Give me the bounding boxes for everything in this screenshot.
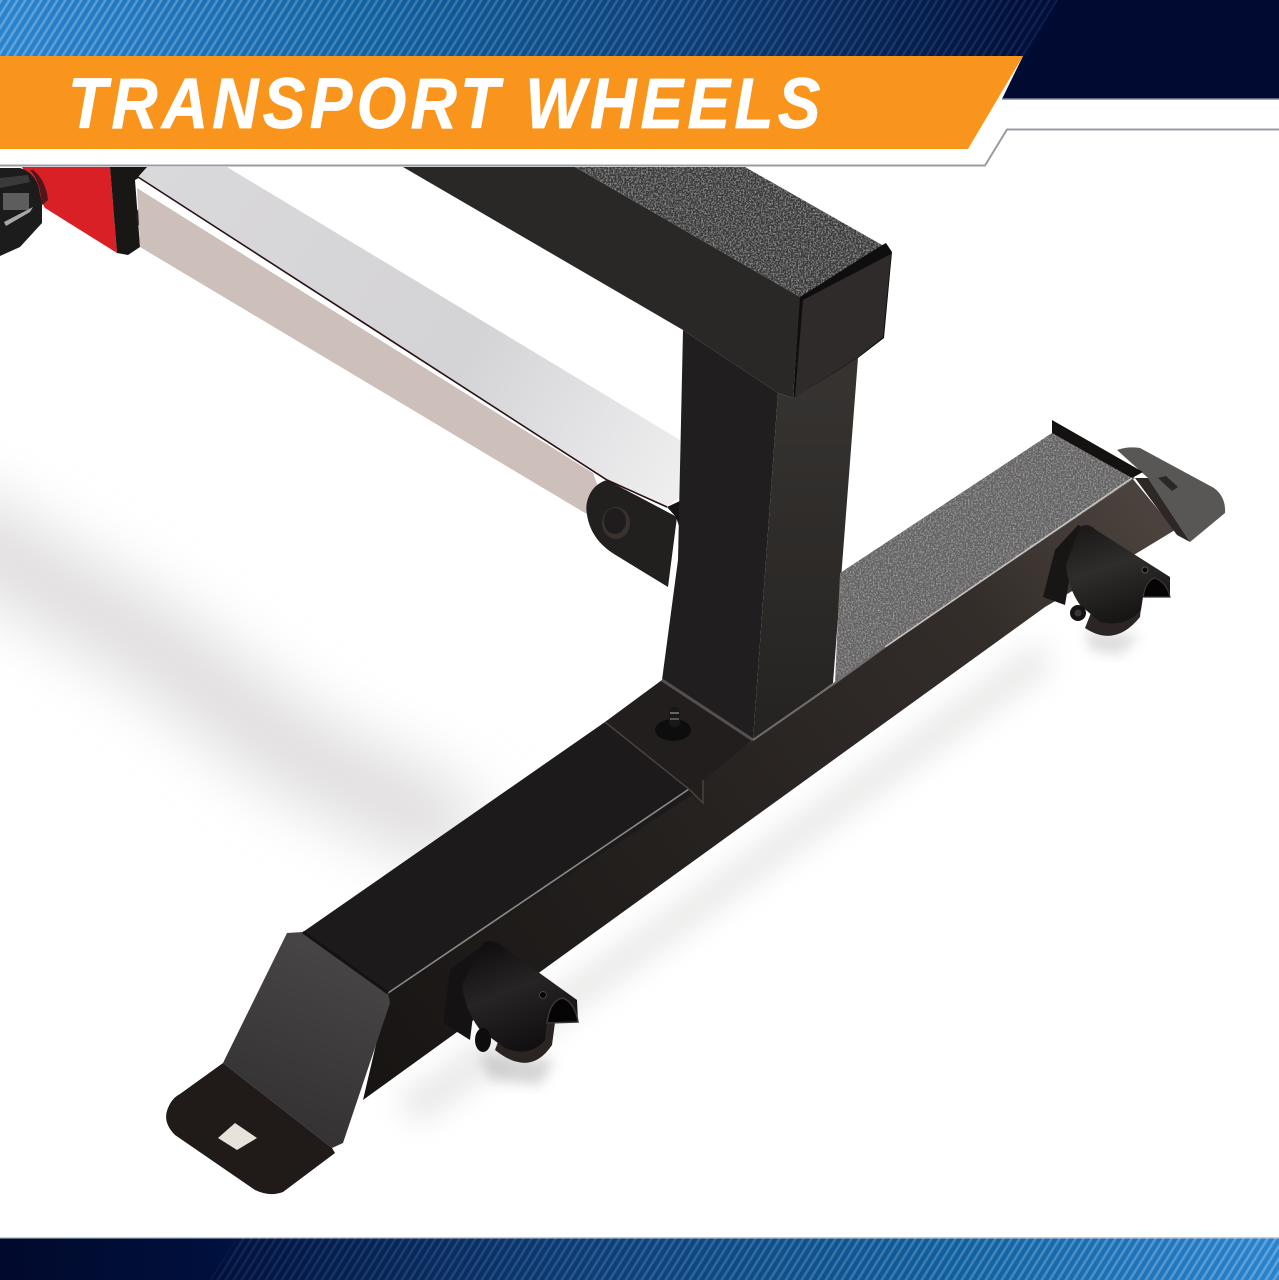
- post left face: [662, 330, 778, 740]
- near edge highlight: [388, 787, 692, 993]
- near transport wheel: [443, 940, 578, 1063]
- near top face: [303, 722, 695, 993]
- far end foot plate: [1117, 447, 1225, 542]
- far end lip: [1052, 420, 1143, 478]
- tube housing: [462, 941, 578, 1052]
- end cap: [795, 254, 891, 397]
- lower base bar: [166, 420, 1225, 1194]
- red bracket: [22, 167, 117, 253]
- axle bolt: [1070, 605, 1086, 621]
- post right face: [753, 358, 858, 740]
- header stripes: [0, 0, 1058, 56]
- floor shadows: [0, 530, 1140, 1125]
- upper crossbar and post: [403, 167, 892, 740]
- knob: [0, 168, 48, 256]
- sleeve: [605, 680, 753, 803]
- orange banner: [0, 56, 1023, 149]
- mounting bracket: [443, 940, 500, 1040]
- far edge highlight: [885, 478, 1132, 647]
- white ribbon backing: [0, 56, 1279, 165]
- joint backing: [793, 243, 892, 399]
- crossbar top face: [575, 167, 882, 297]
- rail side face: [137, 188, 610, 520]
- tube opening: [547, 998, 578, 1023]
- footer stripes: [210, 1238, 1279, 1280]
- rail highlight: [137, 179, 607, 482]
- pivot plate and bolt: [586, 480, 682, 587]
- crossbar side face: [403, 167, 800, 398]
- adjustment knob and red bracket: [0, 167, 158, 256]
- ribbon outline: [0, 130, 1279, 166]
- title: TRANSPORT WHEELS: [68, 65, 820, 144]
- header band: [0, 0, 1279, 99]
- header ribbon: [0, 0, 1279, 166]
- mounting bracket: [1043, 525, 1092, 605]
- silver rail: [137, 167, 680, 520]
- wheel: [1085, 590, 1143, 636]
- wheel: [495, 1010, 556, 1063]
- tube housing: [1066, 525, 1170, 624]
- near foot plate: [166, 1063, 335, 1194]
- far top face: [835, 433, 1135, 683]
- rail seam: [138, 177, 667, 507]
- far transport wheel: [1043, 525, 1170, 636]
- near slanted foot: [223, 932, 390, 1148]
- rail top face: [138, 167, 680, 507]
- nut and bolt: [655, 707, 691, 741]
- footer band: [0, 1237, 1279, 1280]
- axle clip: [475, 1028, 491, 1052]
- tube opening: [1143, 578, 1170, 597]
- black end cap: [110, 167, 158, 255]
- base side face: [363, 478, 1175, 1100]
